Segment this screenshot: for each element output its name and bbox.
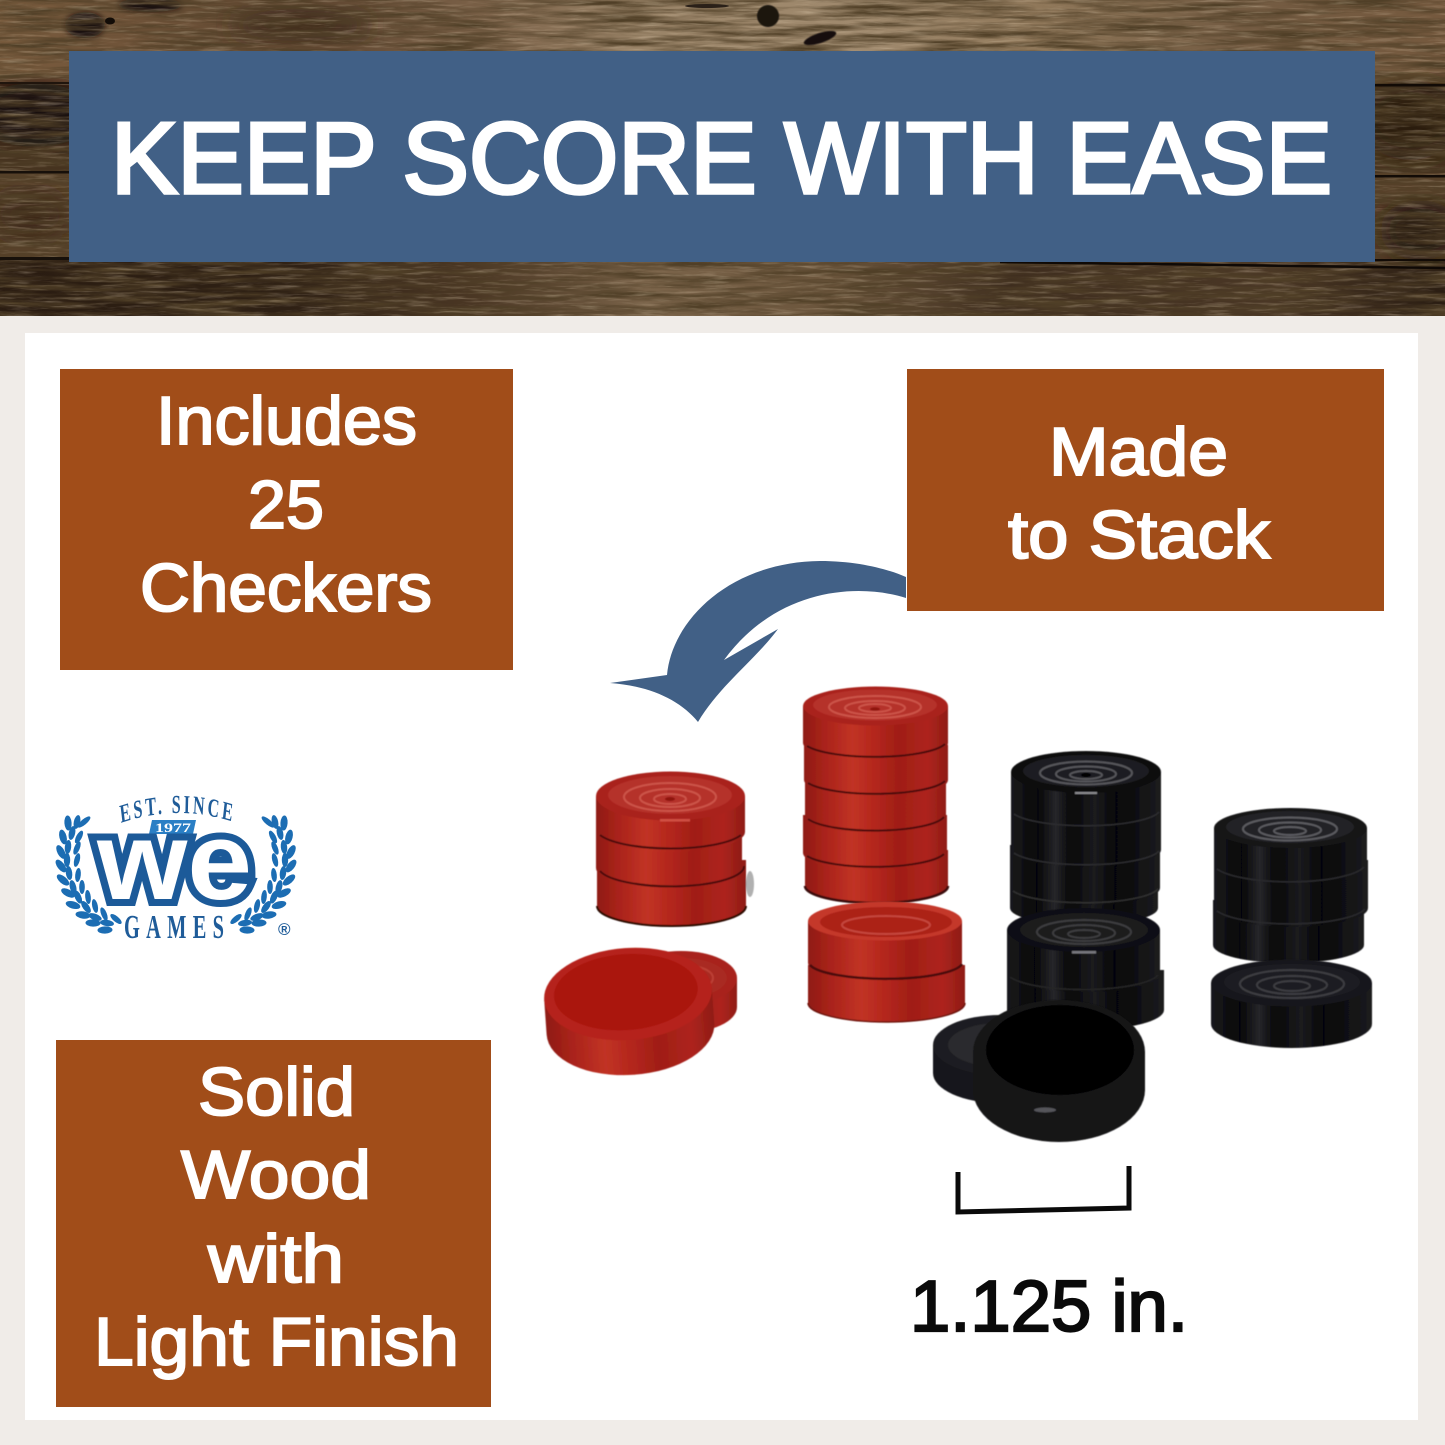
title text: KEEP SCORE WITH EASE bbox=[111, 103, 1332, 215]
callout: includes 25 checkers bbox=[60, 369, 513, 670]
callout: solid wood with light finish: Solid bbox=[198, 1054, 355, 1130]
logo laurel left bbox=[54, 814, 123, 934]
callout: includes 25 checkers: Includes bbox=[156, 383, 417, 459]
black stack of three bbox=[1213, 808, 1368, 963]
flipped red checkers bbox=[541, 942, 737, 1081]
callout: solid wood with light finish: with bbox=[207, 1221, 344, 1297]
callout: solid wood with light finish: Wood bbox=[181, 1137, 371, 1213]
size bracket bbox=[958, 1166, 1129, 1212]
logo we lettering: we bbox=[96, 800, 252, 923]
callout: made to stack bbox=[907, 369, 1384, 611]
callout: includes 25 checkers: Checkers bbox=[140, 550, 432, 626]
arrow pointing to stack bbox=[610, 561, 906, 722]
callout: made to stack: to Stack bbox=[1008, 497, 1271, 573]
flipped black checkers bbox=[933, 1000, 1145, 1142]
logo registered mark: ® bbox=[278, 920, 291, 939]
wood plank header background bbox=[0, 0, 1445, 316]
logo games: GAMES bbox=[124, 909, 230, 946]
white content panel bbox=[25, 333, 1418, 1420]
logo est since: EST. SINCE bbox=[119, 796, 232, 823]
red stack of five bbox=[803, 686, 948, 903]
callout: solid wood with light finish bbox=[56, 1040, 491, 1407]
callout: includes 25 checkers: 25 bbox=[248, 467, 324, 543]
logo 1977 ribbon bbox=[149, 820, 196, 835]
callout: made to stack: Made bbox=[1049, 414, 1228, 490]
title banner bbox=[69, 51, 1375, 262]
size label: 1.125 in. bbox=[910, 1267, 1188, 1347]
callout: solid wood with light finish: Light Finish bbox=[94, 1304, 459, 1380]
logo 1977 ribbon: 1977 bbox=[155, 820, 192, 835]
logo laurel right bbox=[229, 814, 298, 934]
black stack of four plus pair bbox=[1007, 751, 1164, 1030]
red pair in front bbox=[808, 902, 965, 1022]
logo: WE Games bbox=[56, 796, 296, 946]
single black checker bbox=[1211, 960, 1372, 1048]
red stack of three bbox=[596, 772, 754, 926]
